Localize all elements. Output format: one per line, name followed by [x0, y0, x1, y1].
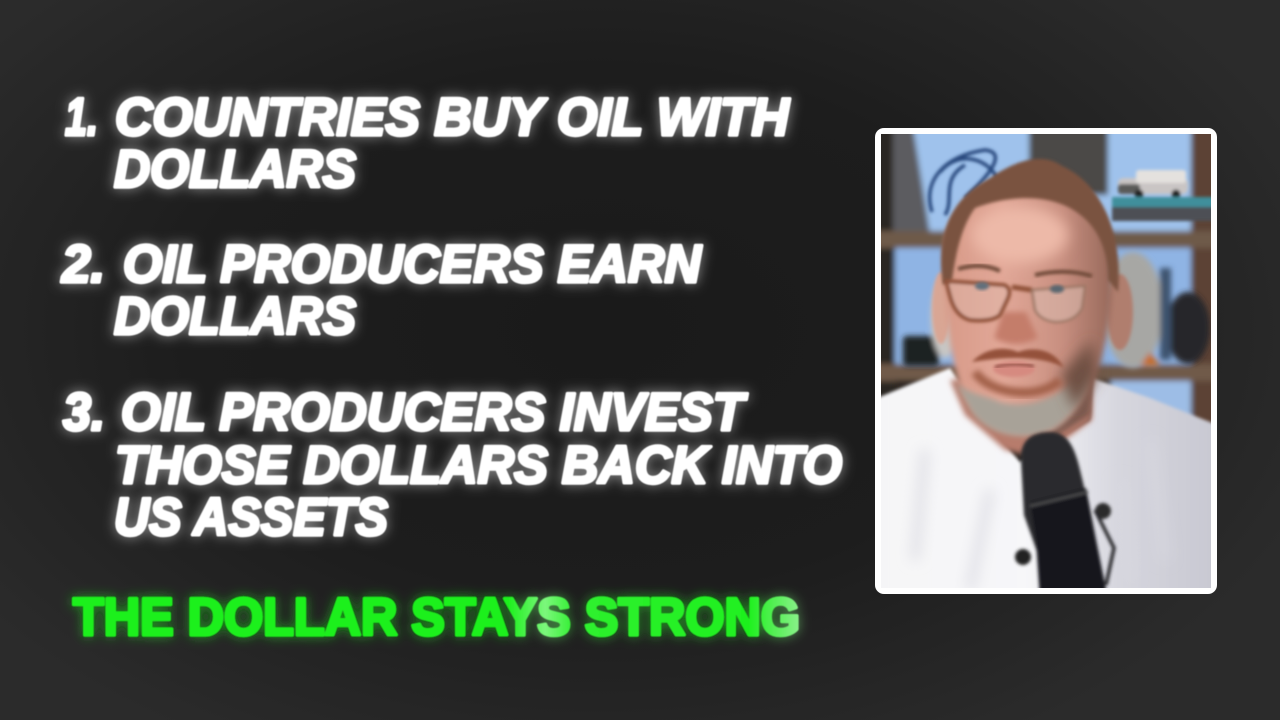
- shirt: [881, 366, 1211, 588]
- list item 3: oil producers invest back into US assets: THOSE DOLLARS BACK INTO: [115, 436, 842, 495]
- neck: [950, 370, 1092, 458]
- hair: [941, 159, 1119, 292]
- moustache: [972, 349, 1064, 368]
- list item 2: oil producers earn dollars: [61, 235, 703, 346]
- list item 3: oil producers invest back into US assets: 3.: [63, 383, 105, 442]
- microphone: [1015, 432, 1114, 600]
- list item 3: oil producers invest back into US assets: [63, 383, 842, 547]
- nose: [994, 312, 1038, 344]
- presenter photo panel: [875, 128, 1217, 594]
- helmet and dark objects: [903, 252, 1210, 368]
- forehead highlight: [972, 207, 1068, 263]
- ears: [932, 272, 950, 344]
- list item 1: countries buy oil with dollars: [65, 88, 791, 199]
- shelf background: blue lit wall: [881, 134, 1211, 424]
- list item 2: oil producers earn dollars: DOLLARS: [114, 287, 356, 346]
- list item 3: oil producers invest back into US assets: OIL PRODUCERS INVEST: [121, 383, 748, 442]
- head: [944, 172, 1112, 434]
- conclusion: the dollar stays strong: THE DOLLAR STAYS STRONG: [73, 588, 800, 647]
- list item 3: oil producers invest back into US assets: US ASSETS: [114, 488, 388, 547]
- mouth: [993, 361, 1035, 377]
- beard: [957, 384, 1086, 438]
- list item 1: countries buy oil with dollars: COUNTRIES BUY OIL WITH: [115, 88, 791, 147]
- list item 2: oil producers earn dollars: 2.: [61, 235, 105, 294]
- glasses: [946, 281, 1085, 322]
- cables: [930, 150, 998, 215]
- list item 2: oil producers earn dollars: OIL PRODUCERS EARN: [123, 235, 703, 294]
- list item 1: countries buy oil with dollars: 1.: [65, 88, 98, 147]
- toy car and shelf: [1112, 170, 1222, 221]
- list item 1: countries buy oil with dollars: DOLLARS: [114, 140, 356, 199]
